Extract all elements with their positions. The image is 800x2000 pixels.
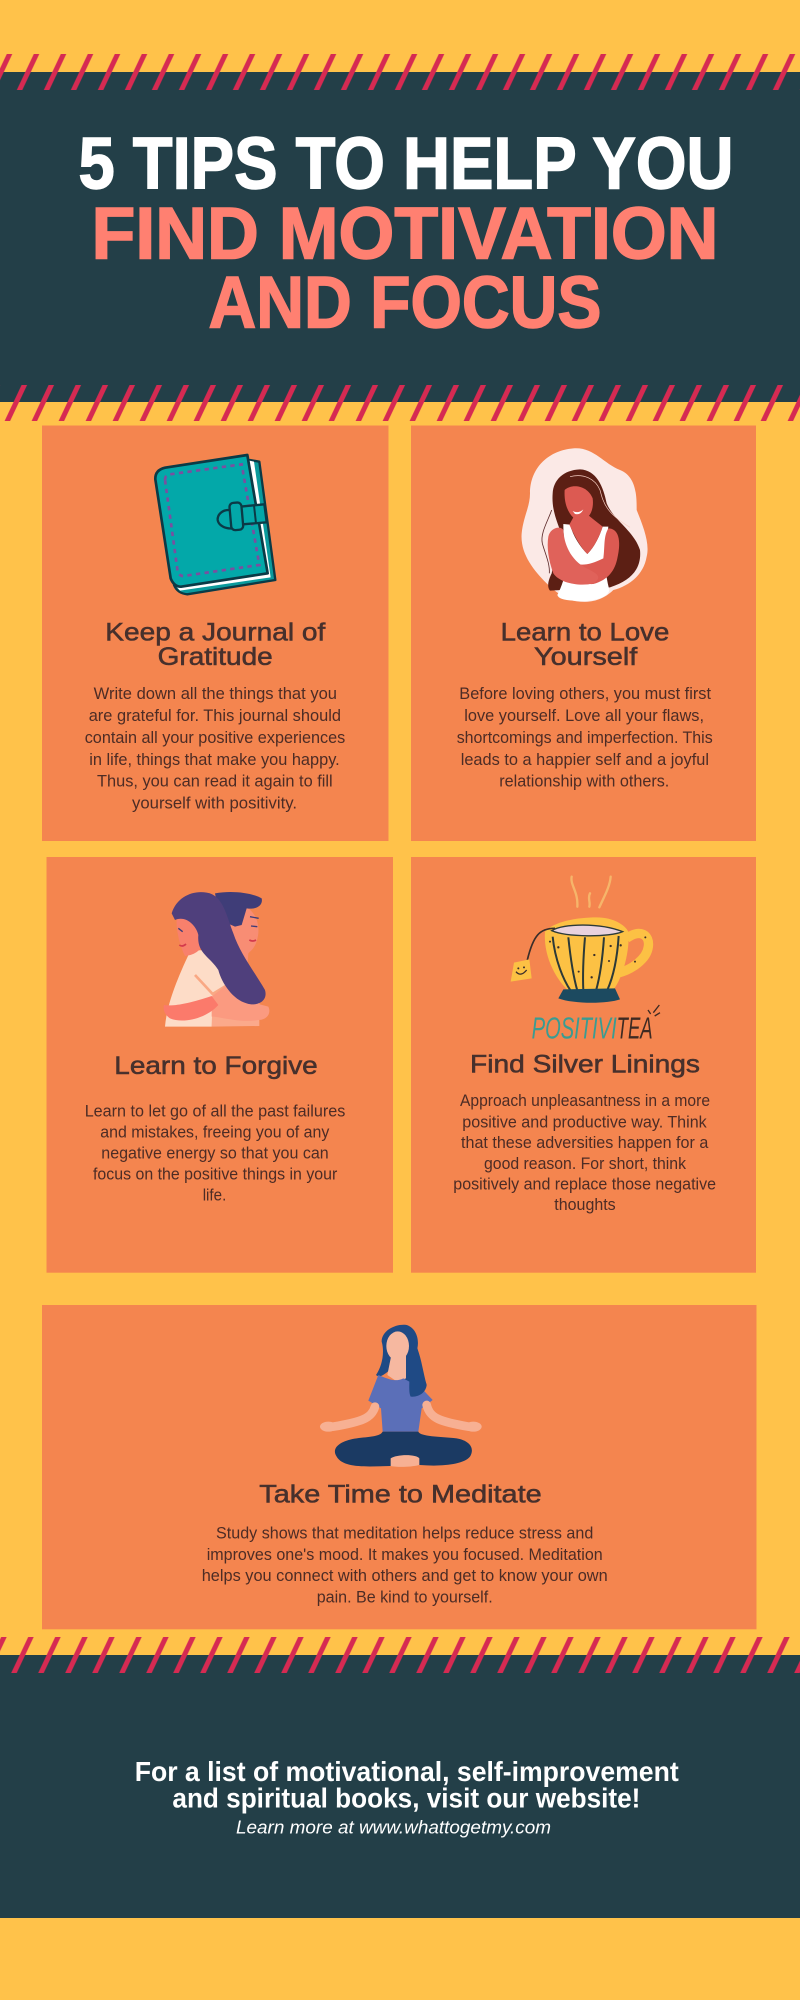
title: 5 TIPS TO HELP YOU — [78, 124, 734, 204]
title: AND FOCUS — [208, 262, 602, 344]
heading: Take Time to Meditate — [259, 1480, 542, 1508]
text block: love yourself. Love all your flaws, — [464, 707, 704, 725]
text block: positive and productive way. Think — [462, 1113, 707, 1131]
text block — [85, 685, 345, 812]
panel: learn to forgive — [46, 857, 393, 1273]
text block: Approach unpleasantness in a more — [460, 1092, 710, 1110]
text block: contain all your positive experiences — [85, 729, 345, 747]
icon: positivitea cup — [511, 877, 660, 1045]
icon: journal — [155, 455, 275, 594]
icon: woman hugging herself — [522, 448, 648, 602]
heading: Learn to Love — [501, 619, 669, 647]
heading — [501, 619, 669, 671]
header banner — [0, 54, 800, 421]
icon: hugging couple — [164, 892, 269, 1027]
text block — [453, 1092, 716, 1214]
text block: improves one's mood. It makes you focused. Meditation — [207, 1546, 603, 1564]
text block — [457, 685, 713, 790]
call to action: and spiritual books, visit our website! — [172, 1783, 640, 1814]
text block: relationship with others. — [499, 772, 669, 790]
icon: positivitea lettering: POSITIVI — [532, 1011, 617, 1045]
text block: yourself with positivity. — [132, 794, 297, 812]
text block: Write down all the things that you — [94, 685, 337, 703]
text block — [202, 1524, 608, 1607]
text block: shortcomings and imperfection. This — [457, 729, 713, 747]
text block: are grateful for. This journal should — [89, 707, 341, 725]
text block: and mistakes, freeing you of any — [100, 1124, 330, 1142]
heading — [105, 619, 325, 671]
panel: take time to meditate — [42, 1305, 756, 1629]
text block: leads to a happier self and a joyful — [461, 751, 709, 769]
text block: pain. Be kind to yourself. — [317, 1589, 493, 1607]
text block: focus on the positive things in your — [93, 1166, 338, 1184]
title: FIND MOTIVATION — [92, 194, 718, 274]
heading: Learn to Forgive — [114, 1052, 318, 1080]
text block — [85, 1103, 345, 1204]
heading: Yourself — [534, 643, 637, 671]
text block: Before loving others, you must first — [459, 685, 711, 703]
heading: Find Silver Linings — [470, 1051, 700, 1079]
text block: Learn to let go of all the past failures — [85, 1103, 345, 1121]
text block: life. — [203, 1186, 226, 1204]
call to action — [135, 1756, 679, 1814]
footer banner — [0, 1637, 800, 1918]
text block: helps you connect with others and get to know your own — [202, 1567, 608, 1585]
panel: find silver linings — [411, 857, 756, 1273]
text block: Study shows that meditation helps reduce stress and — [216, 1524, 593, 1542]
text block: negative energy so that you can — [101, 1145, 329, 1163]
panel: keep a journal of gratitude — [42, 426, 388, 841]
text block: in life, things that make you happy. — [89, 751, 340, 769]
text block: good reason. For short, think — [484, 1155, 687, 1173]
text block: thoughts — [554, 1196, 616, 1214]
call to action: For a list of motivational, self-improvement — [135, 1756, 679, 1787]
icon: positivitea lettering: TEA — [617, 1011, 653, 1045]
text block: Thus, you can read it again to fill — [97, 772, 333, 790]
panel: learn to love yourself — [411, 426, 756, 841]
text block: that these adversities happen for a — [461, 1134, 709, 1152]
heading: Gratitude — [158, 643, 273, 671]
icon: meditating woman — [320, 1325, 482, 1467]
website link text: Learn more at www.whattogetmy.com — [236, 1817, 551, 1837]
text block: positively and replace those negative — [453, 1176, 716, 1194]
heading: Keep a Journal of — [105, 619, 325, 647]
title — [78, 124, 734, 344]
